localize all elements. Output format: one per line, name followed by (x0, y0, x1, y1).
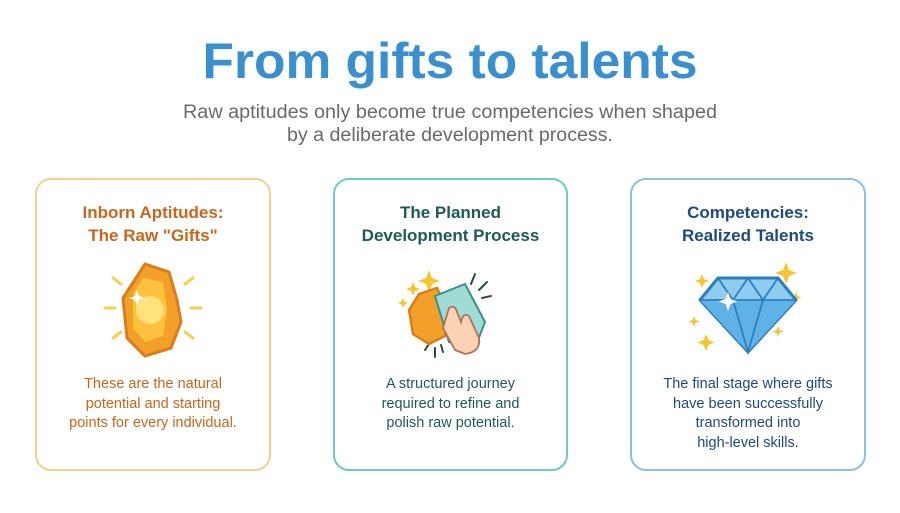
subtitle: by a deliberate development process. (287, 125, 613, 146)
body text: These are the natural (84, 376, 222, 392)
body text: have been successfully (673, 396, 823, 412)
body text: The final stage where gifts (663, 376, 833, 392)
heading (82, 203, 224, 245)
title: From gifts to talents (202, 33, 698, 89)
heading: Inborn Aptitudes: (82, 203, 224, 222)
heading: Competencies: (687, 203, 809, 222)
heading: The Raw "Gifts" (88, 226, 218, 245)
body text (382, 376, 519, 431)
heading: Realized Talents (682, 226, 814, 245)
panel: development process (333, 178, 568, 471)
icon: raw gem (104, 262, 202, 358)
heading (682, 203, 814, 245)
body text: required to refine and (382, 396, 519, 412)
heading: The Planned (400, 203, 501, 222)
title (183, 33, 717, 146)
body text: A structured journey (386, 376, 515, 392)
subtitle: Raw aptitudes only become true competencies when shaped (183, 102, 717, 123)
heading (362, 203, 539, 245)
body text (663, 376, 833, 450)
panel: inborn aptitudes (35, 178, 271, 471)
body text: high-level skills. (697, 434, 799, 450)
body text: polish raw potential. (386, 415, 515, 431)
body text: potential and starting (86, 396, 220, 412)
heading: Development Process (362, 226, 539, 245)
subtitle (183, 102, 717, 146)
panel: competencies (630, 178, 866, 471)
body text: transformed into (696, 415, 800, 431)
icon: diamond (688, 262, 802, 356)
icon: polishing hand (398, 270, 492, 358)
body text: points for every individual. (69, 415, 237, 431)
body text (69, 376, 237, 431)
